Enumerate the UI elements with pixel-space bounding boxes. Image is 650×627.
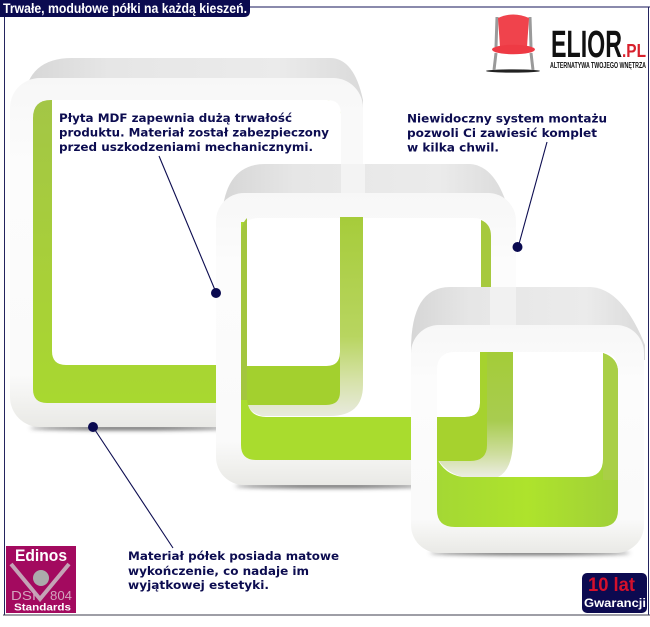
- shelf: small cube: [411, 287, 645, 555]
- badge: Edinos DSI 804 Standards: Edinos: [15, 546, 67, 565]
- callout: MDF durability: Płyta MDF zapewnia dużą trwałość: [59, 111, 292, 125]
- title tab: Trwałe, modułowe półki na każdą kieszeń.: [3, 1, 247, 16]
- badge: Edinos DSI 804 Standards: Standards: [14, 602, 71, 614]
- callout: MDF durability: produktu. Materiał został zabezpieczony: [59, 126, 330, 140]
- badge: 10 lat Gwarancji: [582, 573, 647, 613]
- icon: red chair: [486, 14, 540, 73]
- callout: matte finish: wyjątkowej estetyki.: [128, 578, 269, 592]
- badge: 10 lat Gwarancji: 10 lat: [588, 575, 636, 596]
- callout: invisible mounting: pozwoli Ci zawiesić komplet: [407, 126, 598, 140]
- badge: 10 lat Gwarancji: Gwarancji: [584, 596, 646, 610]
- callout: matte finish: Materiał półek posiada matowe: [128, 549, 339, 563]
- callout: matte finish: [88, 422, 339, 592]
- badge: Edinos DSI 804 Standards: [6, 546, 76, 614]
- callout: matte finish: wykończenie, co nadaje im: [128, 564, 309, 578]
- shelf: medium cube: [216, 164, 516, 488]
- callout: invisible mounting: Niewidoczny system montażu: [407, 112, 607, 126]
- shelf: large cube: [10, 58, 363, 430]
- callout: invisible mounting: w kilka chwil.: [407, 140, 499, 154]
- callout: MDF durability: [59, 111, 330, 298]
- callout: MDF durability: przed uszkodzeniami mechanicznymi.: [59, 140, 313, 154]
- logo: Elior: [486, 14, 646, 73]
- callout: invisible mounting: [407, 112, 607, 252]
- badge: Edinos DSI 804 Standards: DSI: [11, 589, 36, 603]
- badge: Edinos DSI 804 Standards: 804: [50, 589, 72, 603]
- logo: Elior: .PL: [622, 41, 646, 61]
